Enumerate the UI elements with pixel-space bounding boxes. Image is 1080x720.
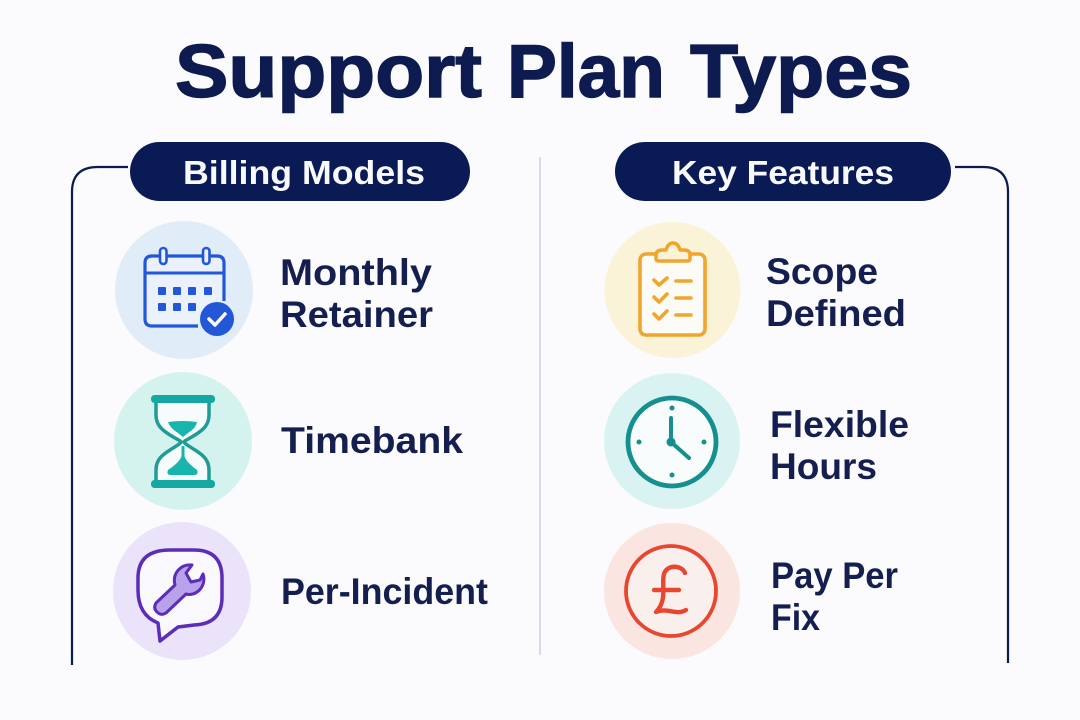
title — [175, 29, 912, 113]
title: Plan — [507, 29, 665, 113]
center divider — [539, 157, 541, 655]
label: Flexible — [770, 404, 909, 445]
label: Pay Per — [771, 555, 898, 596]
heading: Key Features: Key Features — [672, 154, 894, 191]
label: Hours — [770, 446, 877, 487]
heading: Billing Models — [130, 142, 470, 201]
item: Timebank — [114, 372, 463, 510]
label — [771, 555, 898, 638]
label — [280, 252, 433, 335]
icon: wrench speech bubble — [113, 522, 251, 660]
item: Scope Defined — [604, 222, 906, 358]
icon: clock — [604, 373, 740, 509]
label: Monthly — [280, 252, 432, 293]
title: Types — [690, 29, 912, 113]
heading: Key Features — [615, 142, 951, 201]
label — [766, 251, 906, 334]
label: Fix — [771, 597, 820, 638]
left panel bracket — [72, 167, 128, 665]
label — [770, 404, 909, 487]
icon: pound coin — [604, 523, 740, 659]
icon: calendar — [115, 221, 253, 359]
item: Per-Incident — [113, 522, 488, 660]
label: Retainer — [280, 294, 433, 335]
label: Defined — [766, 293, 906, 334]
label: Scope — [766, 251, 878, 292]
item: Pay Per Fix — [604, 523, 898, 659]
item: Monthly Retainer — [115, 221, 433, 359]
label: Timebank — [281, 420, 463, 461]
item: Flexible Hours — [604, 373, 909, 509]
title: Support — [175, 29, 482, 113]
icon: clipboard checklist — [604, 222, 740, 358]
label: Per-Incident — [281, 571, 488, 612]
heading: Billing Models: Billing Models — [183, 154, 425, 191]
right panel bracket — [955, 167, 1008, 663]
icon: hourglass — [114, 372, 252, 510]
